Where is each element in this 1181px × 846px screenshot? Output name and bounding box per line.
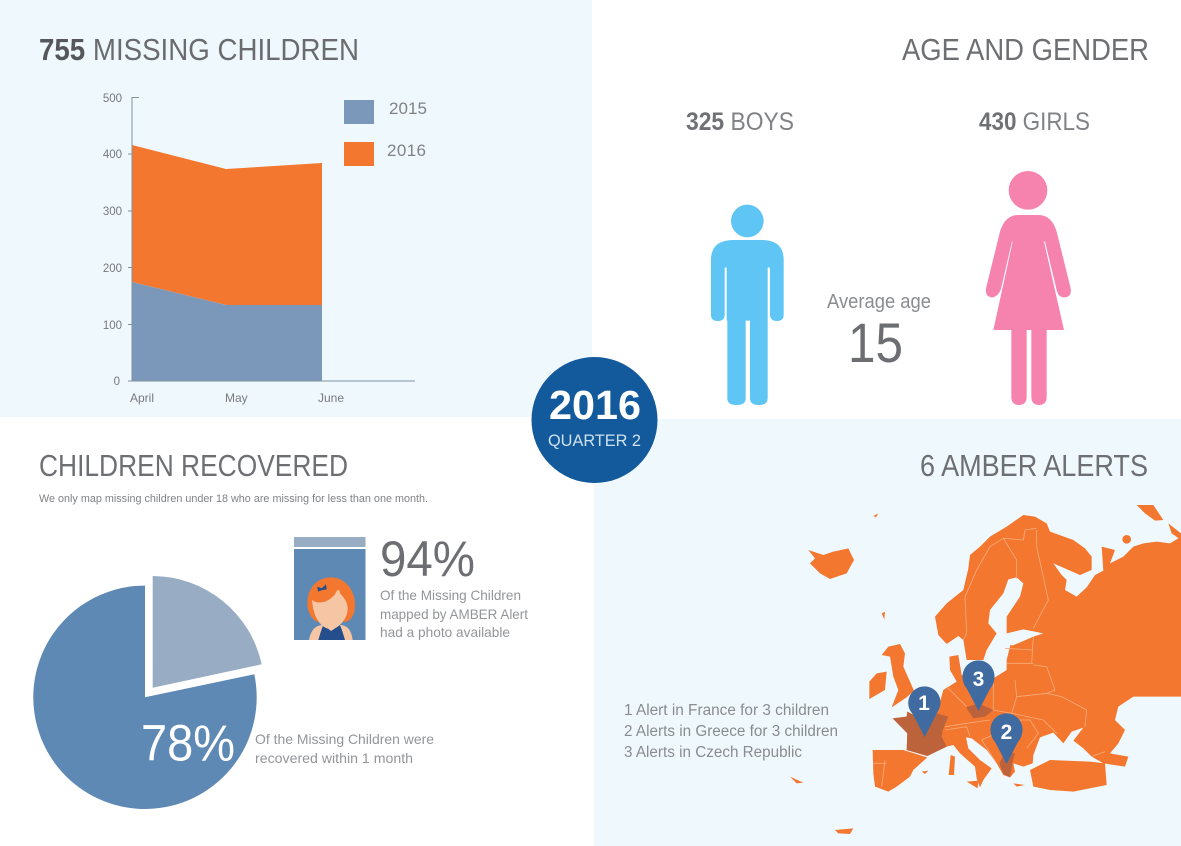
pie caption: Of the Missing Children were bbox=[255, 731, 434, 747]
alert list: 3 Alerts in Czech Republic bbox=[624, 744, 802, 761]
icon: girl bbox=[986, 171, 1071, 405]
chart legend: 2016 bbox=[387, 141, 426, 160]
pin 3 czech republic bbox=[962, 660, 994, 711]
average age: Average age bbox=[827, 291, 931, 313]
area chart: June bbox=[318, 391, 344, 405]
girls count: 430 GIRLS bbox=[979, 108, 1090, 136]
icon: boy bbox=[711, 205, 784, 405]
photo statistic bbox=[380, 531, 528, 640]
photo statistic: Of the Missing Children bbox=[380, 587, 521, 603]
pin 1 france bbox=[908, 686, 940, 737]
alert list: 1 Alert in France for 3 children bbox=[624, 702, 829, 719]
average age bbox=[827, 291, 931, 374]
photo statistic: mapped by AMBER Alert bbox=[380, 606, 528, 622]
pie chart: 78% bbox=[141, 714, 235, 772]
average age: 15 bbox=[848, 311, 903, 374]
area chart: 300 bbox=[103, 206, 122, 218]
heading: age and gender: AGE AND GENDER bbox=[902, 32, 1149, 67]
area chart bbox=[103, 93, 415, 405]
area chart: 100 bbox=[103, 320, 122, 332]
heading: 755 missing children: 755 MISSING CHILDREN bbox=[39, 32, 359, 67]
pie caption: recovered within 1 month bbox=[255, 750, 413, 766]
pin 1 france: 1 bbox=[918, 692, 930, 715]
highlighted countries bbox=[893, 703, 1015, 777]
area chart: 400 bbox=[103, 149, 122, 161]
chart legend: 2015 bbox=[389, 99, 427, 118]
pie caption bbox=[255, 731, 434, 766]
photo statistic: 94% bbox=[380, 531, 475, 587]
icon: missing child photo bbox=[294, 537, 366, 640]
pin 3 czech republic: 3 bbox=[973, 668, 984, 691]
panel: missing children bbox=[0, 0, 592, 417]
area chart: 0 bbox=[114, 376, 120, 388]
center badge: 2016 quarter 2 bbox=[532, 357, 658, 483]
area chart: 500 bbox=[103, 93, 122, 105]
panel: amber alerts bbox=[594, 419, 1181, 846]
borders bbox=[873, 528, 1105, 787]
alert list bbox=[624, 702, 838, 761]
panel: children recovered bbox=[33, 448, 528, 809]
pin 2 greece bbox=[990, 713, 1022, 764]
center badge: 2016 quarter 2: 2016 bbox=[549, 382, 641, 428]
center badge: 2016 quarter 2: QUARTER 2 bbox=[548, 431, 641, 450]
chart legend bbox=[344, 99, 427, 166]
pie chart bbox=[33, 576, 262, 809]
boys count: 325 BOYS bbox=[686, 108, 794, 136]
alert list: 2 Alerts in Greece for 3 children bbox=[624, 723, 838, 740]
area chart: April bbox=[130, 391, 154, 405]
heading: 6 amber alerts: 6 AMBER ALERTS bbox=[920, 448, 1148, 483]
panel: age and gender bbox=[686, 32, 1149, 405]
heading: children recovered: CHILDREN RECOVERED bbox=[39, 448, 348, 483]
note: We only map missing children under 18 who are missing for less than one month. bbox=[39, 493, 428, 505]
area chart: 200 bbox=[103, 263, 122, 275]
map of europe bbox=[790, 505, 1181, 834]
photo statistic: had a photo available bbox=[380, 624, 510, 640]
area chart: May bbox=[225, 391, 248, 405]
pin 2 greece: 2 bbox=[1001, 721, 1012, 744]
